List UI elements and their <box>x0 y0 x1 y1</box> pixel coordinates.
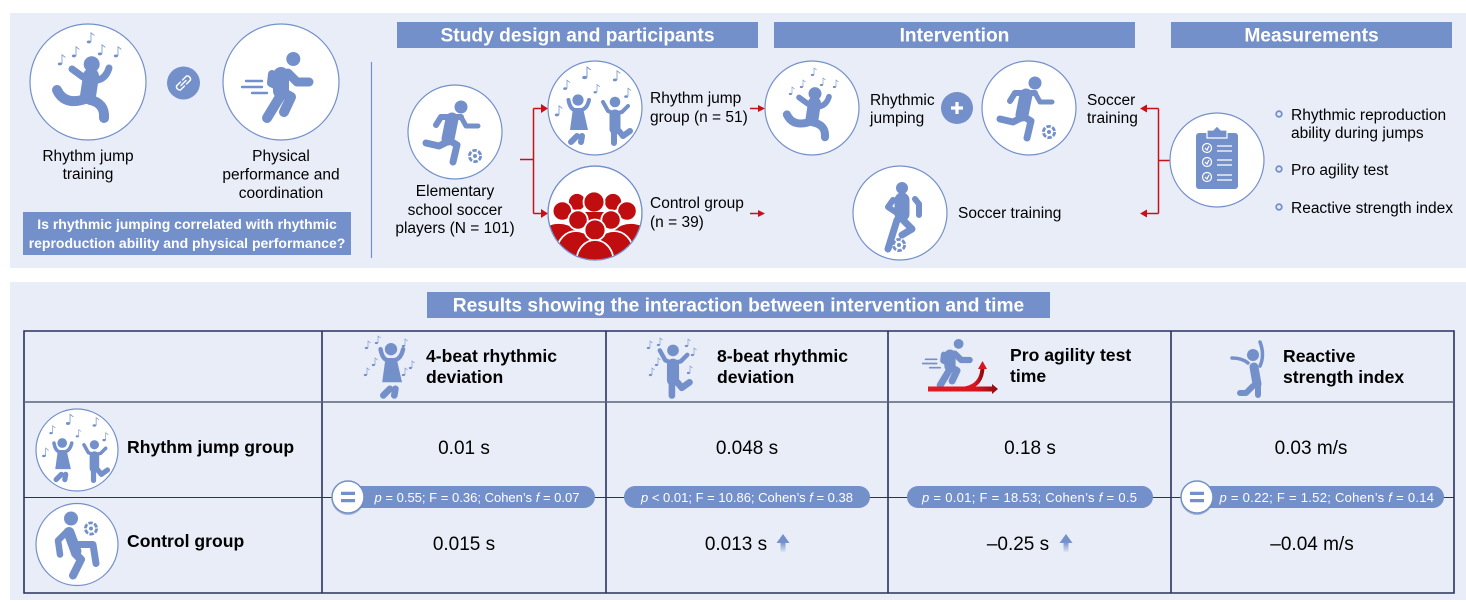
results table <box>24 331 1454 593</box>
header: pro agility test time <box>923 339 1131 394</box>
label: physical performance and coordination: coordination <box>239 185 323 202</box>
arrow: control group to intervention <box>750 210 765 217</box>
header: reactive strength index: Reactive <box>1283 346 1355 366</box>
values: control group <box>433 534 1354 555</box>
label: elementary school soccer players: players (N = 101) <box>395 220 515 237</box>
header: pro agility test time: time <box>1010 366 1046 386</box>
label: soccer training: Soccer <box>1087 92 1135 109</box>
heading: study design <box>397 22 758 48</box>
values: control group: –0.25 s <box>987 534 1049 555</box>
callout: research question <box>23 212 351 255</box>
label: rhythm jump training: Rhythm jump <box>42 148 134 165</box>
row label: rhythm jump group: Rhythm jump group <box>127 437 294 457</box>
icon: up arrow agility <box>1060 534 1072 552</box>
header: 4-beat rhythmic deviation <box>364 336 557 395</box>
label: physical performance and coordination: performance and <box>222 166 340 184</box>
header: 8-beat rhythmic deviation: deviation <box>717 367 794 387</box>
icon: soccer players <box>408 85 502 179</box>
list: measurements: Reactive strength index <box>1291 200 1453 217</box>
row label: control group <box>36 504 245 586</box>
label: elementary school soccer players: school soccer <box>408 202 502 219</box>
label: elementary school soccer players: Elementary <box>416 183 494 200</box>
panel: top background <box>10 13 1466 268</box>
pill: agility statistics: p = 0.01; F = 18.53; Cohen’s f = 0.5 <box>921 490 1137 505</box>
arrow: split to groups <box>520 104 548 218</box>
heading: measurements <box>1171 22 1452 48</box>
values: rhythm jump group: 0.048 s <box>716 438 778 459</box>
panel: bottom background <box>10 282 1466 600</box>
icon: rhythm jump group <box>548 61 642 155</box>
heading: results: Results showing the interaction between intervention and time <box>453 296 1025 316</box>
icon: clipboard <box>1170 113 1264 207</box>
list: measurements: ability during jumps <box>1291 125 1424 142</box>
icon: rhythm jump training <box>30 24 146 140</box>
values: rhythm jump group: 0.18 s <box>1004 438 1056 459</box>
list: measurements: Pro agility test <box>1291 162 1389 179</box>
icon: control group crowd <box>547 165 643 261</box>
row label: control group: Control group <box>127 531 245 551</box>
icon: link <box>167 66 200 100</box>
header: 4-beat rhythmic deviation: deviation <box>426 367 503 387</box>
heading: study design: Study design and participants <box>440 26 714 46</box>
header: 4-beat rhythmic deviation: 4-beat rhythmic <box>426 346 557 366</box>
heading: measurements: Measurements <box>1244 26 1379 46</box>
values: rhythm jump group: 0.03 m/s <box>1275 438 1347 459</box>
callout: research question: reproduction ability and physical performance? <box>29 235 345 251</box>
pill: agility statistics <box>907 486 1153 508</box>
list: measurements: Rhythmic reproduction <box>1291 107 1446 124</box>
label: rhythm jump training: training <box>63 166 113 183</box>
panel: research question <box>23 24 351 255</box>
header: 8-beat rhythmic deviation: 8-beat rhythmic <box>717 346 848 366</box>
label: physical performance and coordination: Physical <box>252 148 310 165</box>
heading: intervention: Intervention <box>900 26 1009 46</box>
arrow: measurements to interventions <box>1140 104 1170 218</box>
header: reactive strength index <box>1232 342 1404 395</box>
icon: rhythmic jumping <box>765 61 859 155</box>
label: rhythmic jumping: Rhythmic <box>870 92 935 109</box>
row label: rhythm jump group <box>36 409 294 491</box>
values: rhythm jump group <box>438 438 1347 459</box>
pill: 8-beat statistics: p < 0.01; F = 10.86; Cohen’s f = 0.38 <box>640 490 853 505</box>
values: control group: 0.015 s <box>433 534 495 555</box>
callout: research question: Is rhythmic jumping correlated with rhythmic <box>37 216 337 232</box>
label: rhythmic jumping: jumping <box>869 110 924 127</box>
label: rhythm jump group: Rhythm jump <box>650 90 741 107</box>
values: rhythm jump group: 0.01 s <box>438 438 490 459</box>
icon: soccer training <box>982 61 1076 155</box>
pill: 4-beat statistics: p = 0.55; F = 0.36; Cohen’s f = 0.07 <box>374 490 580 505</box>
header: 8-beat rhythmic deviation <box>647 338 848 396</box>
pill: 8-beat statistics <box>624 486 870 508</box>
label: control group: (n = 39) <box>650 214 704 231</box>
label: control soccer training: Soccer training <box>958 205 1061 222</box>
icon: up arrow 8-beat <box>776 534 790 552</box>
icon: control soccer training <box>853 166 947 260</box>
list: measurements <box>1276 107 1453 217</box>
label: control group: Control group <box>650 195 744 212</box>
values: control group: 0.013 s <box>705 534 767 555</box>
arrow: rhythm group to intervention <box>750 105 765 112</box>
label: soccer training: training <box>1087 110 1138 127</box>
heading: intervention <box>774 22 1135 48</box>
icon: plus <box>941 92 973 124</box>
header: reactive strength index: strength index <box>1283 367 1404 387</box>
pill: reactive strength statistics <box>1180 481 1444 515</box>
label: rhythm jump group: group (n = 51) <box>650 109 748 126</box>
icon: physical performance runner <box>223 24 339 140</box>
header: pro agility test time: Pro agility test <box>1010 345 1131 365</box>
values: control group: –0.04 m/s <box>1270 534 1354 555</box>
pill: reactive strength statistics: p = 0.22; F = 1.52; Cohen’s f = 0.14 <box>1218 490 1434 505</box>
pill: 4-beat statistics <box>332 481 595 515</box>
